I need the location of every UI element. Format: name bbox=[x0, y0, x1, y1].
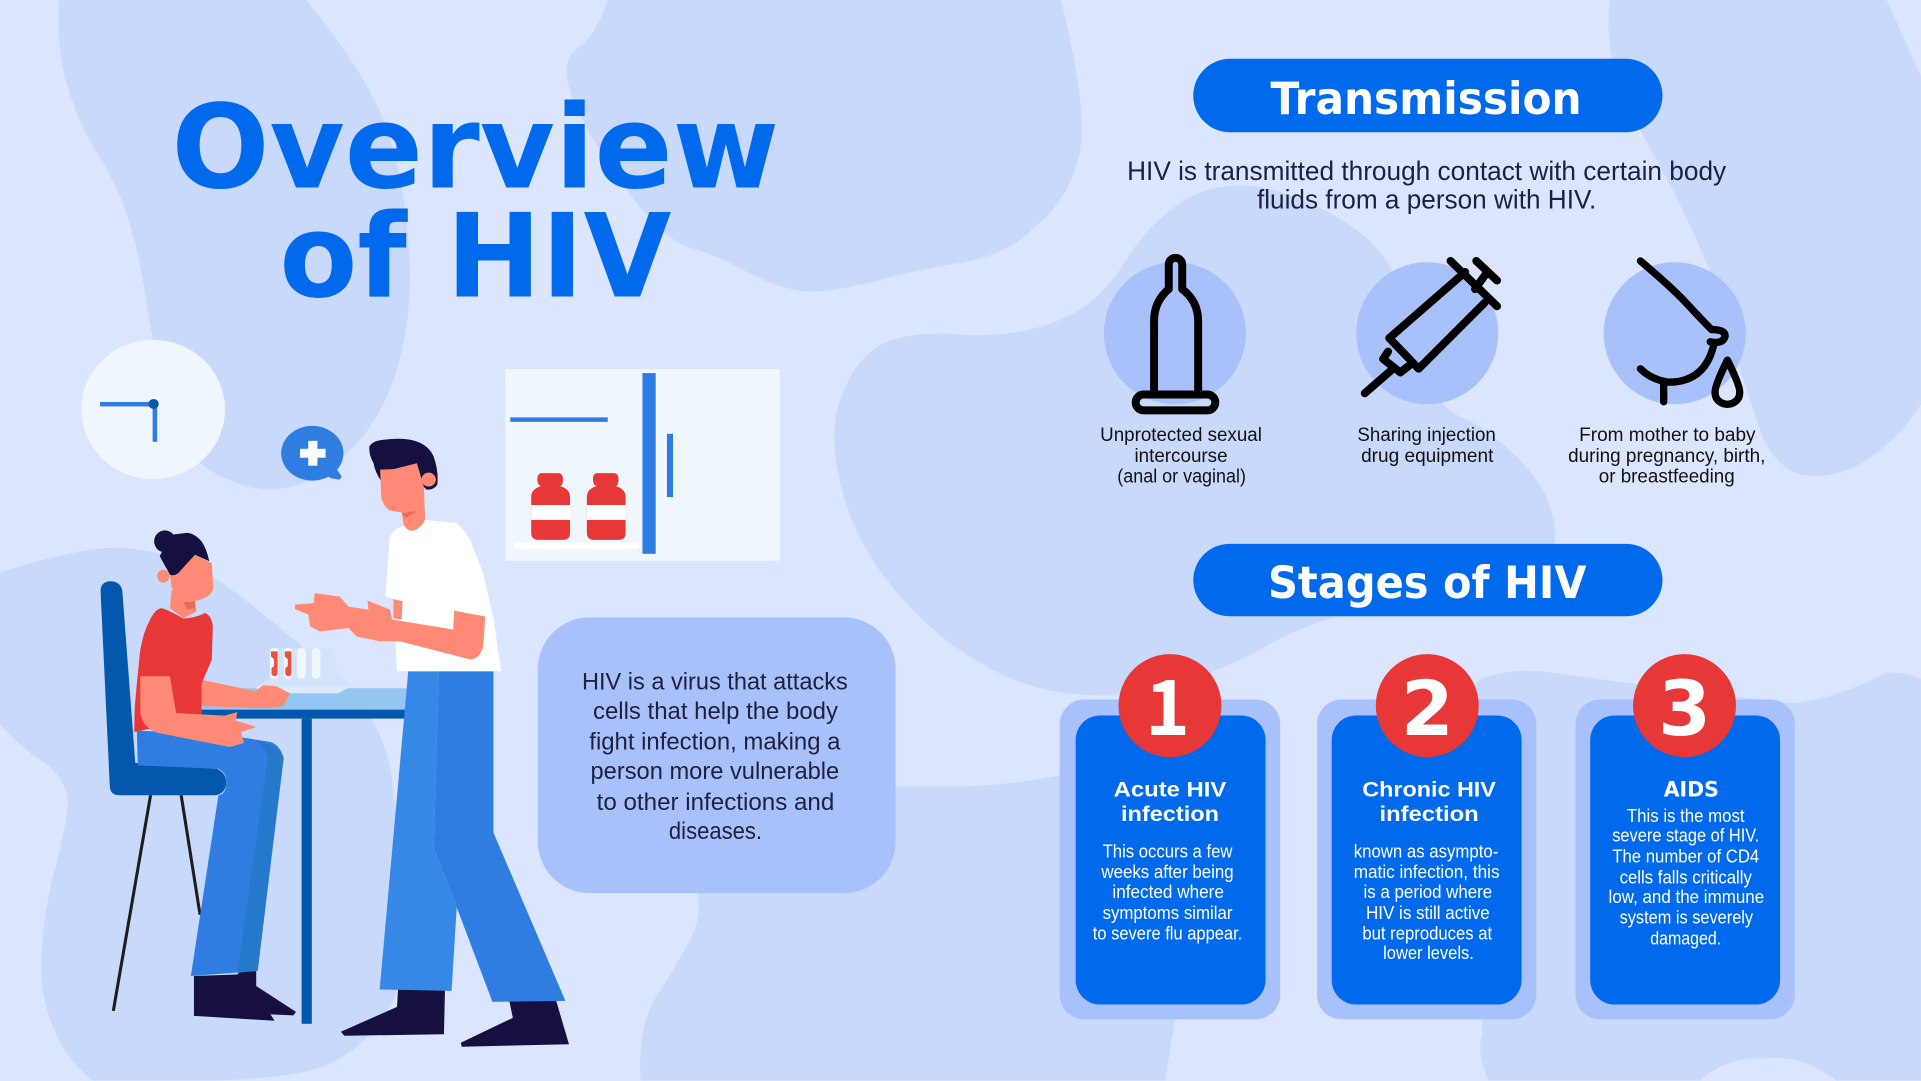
stage description: This is the most bbox=[1627, 805, 1745, 826]
description text: HIV is a virus that attacks bbox=[582, 669, 848, 696]
panel: stage 1 bbox=[1060, 647, 1280, 1019]
stage description: low, and the immune bbox=[1609, 886, 1764, 907]
heading: Stages of HIV bbox=[1193, 544, 1662, 616]
figure: doctor bbox=[295, 439, 569, 1047]
label: intercourse bbox=[1134, 445, 1228, 467]
label: From mother to baby bbox=[1579, 424, 1756, 446]
transmission intro text: fluids from a person with HIV. bbox=[1257, 184, 1596, 214]
number 2: 2 bbox=[1401, 665, 1454, 753]
stage description: damaged. bbox=[1650, 928, 1721, 949]
stage title bbox=[1362, 777, 1497, 826]
panel: stage 2 bbox=[1317, 654, 1536, 1019]
panel: stage 3 bbox=[1575, 654, 1795, 1019]
transmission intro text bbox=[1127, 156, 1727, 214]
icon: medicine bottle bbox=[531, 473, 570, 540]
transmission route: injection equipment bbox=[1356, 261, 1498, 467]
stage title bbox=[1114, 777, 1227, 826]
table with test tubes bbox=[202, 648, 407, 1024]
stage title: Chronic HIV bbox=[1362, 777, 1497, 801]
label: drug equipment bbox=[1361, 445, 1494, 467]
heading: Transmission: Transmission bbox=[1270, 74, 1582, 125]
label: during pregnancy, birth, bbox=[1568, 445, 1765, 467]
description text: person more vulnerable bbox=[591, 758, 839, 785]
heading: Transmission bbox=[1193, 59, 1662, 132]
label: or breastfeeding bbox=[1599, 466, 1735, 488]
transmission route: mother to baby bbox=[1568, 261, 1765, 488]
description text bbox=[582, 669, 848, 845]
icon: medicine bottle bbox=[587, 473, 626, 540]
icon: breast with drop bbox=[1640, 261, 1740, 404]
description text: diseases. bbox=[669, 818, 762, 845]
label: (anal or vaginal) bbox=[1117, 466, 1246, 488]
title bbox=[172, 80, 779, 324]
stage description: This occurs a few bbox=[1103, 841, 1233, 862]
stage description: known as asympto- bbox=[1354, 841, 1498, 862]
info box bbox=[538, 617, 896, 893]
stage title: infection bbox=[1121, 802, 1219, 826]
stage description: cells falls critically bbox=[1620, 866, 1753, 887]
medicine cabinet bbox=[505, 369, 780, 561]
label bbox=[1568, 424, 1765, 488]
description text: to other infections and bbox=[597, 789, 834, 816]
transmission intro text: HIV is transmitted through contact with certain body bbox=[1127, 156, 1727, 186]
stage description: infected where bbox=[1112, 881, 1224, 902]
transmission route: sexual intercourse bbox=[1100, 258, 1262, 488]
label bbox=[1100, 424, 1262, 488]
description text: cells that help the body bbox=[593, 698, 839, 725]
label: Sharing injection bbox=[1357, 424, 1496, 446]
illustration: clinic scene bbox=[81, 340, 780, 1047]
figure: seated patient bbox=[134, 530, 296, 1021]
stage description: severe stage of HIV. bbox=[1612, 825, 1759, 846]
icon: wall clock bbox=[81, 340, 225, 479]
stage title: infection bbox=[1379, 802, 1479, 826]
title: Overview bbox=[172, 80, 779, 215]
stage description: weeks after being bbox=[1100, 861, 1234, 882]
stage description: matic infection, this bbox=[1354, 861, 1500, 882]
number 3: 3 bbox=[1658, 665, 1711, 753]
stage description: symptoms similar bbox=[1103, 902, 1232, 923]
description text: fight infection, making a bbox=[589, 729, 841, 756]
label: Unprotected sexual bbox=[1100, 424, 1262, 446]
stage title: AIDS bbox=[1664, 777, 1719, 802]
chair bbox=[101, 581, 226, 1011]
stage description: but reproduces at bbox=[1362, 923, 1492, 944]
stage title: Acute HIV bbox=[1114, 777, 1227, 801]
stage description: system is severely bbox=[1620, 907, 1754, 928]
stage description: The number of CD4 bbox=[1612, 845, 1759, 866]
label bbox=[1357, 424, 1496, 467]
title: of HIV bbox=[279, 189, 671, 324]
stage description: is a period where bbox=[1364, 881, 1492, 902]
heading: Stages of HIV: Stages of HIV bbox=[1268, 558, 1587, 609]
stage description bbox=[1354, 841, 1500, 963]
stage description bbox=[1093, 841, 1242, 944]
icon: condom bbox=[1136, 258, 1215, 410]
stage description: HIV is still active bbox=[1366, 902, 1490, 923]
stage description: to severe flu appear. bbox=[1093, 923, 1242, 944]
stage description: lower levels. bbox=[1383, 942, 1474, 963]
icon: syringe bbox=[1365, 261, 1497, 393]
icon: medical speech bubble bbox=[281, 426, 343, 481]
stage description bbox=[1609, 805, 1764, 949]
number 1: 1 bbox=[1145, 647, 1190, 757]
